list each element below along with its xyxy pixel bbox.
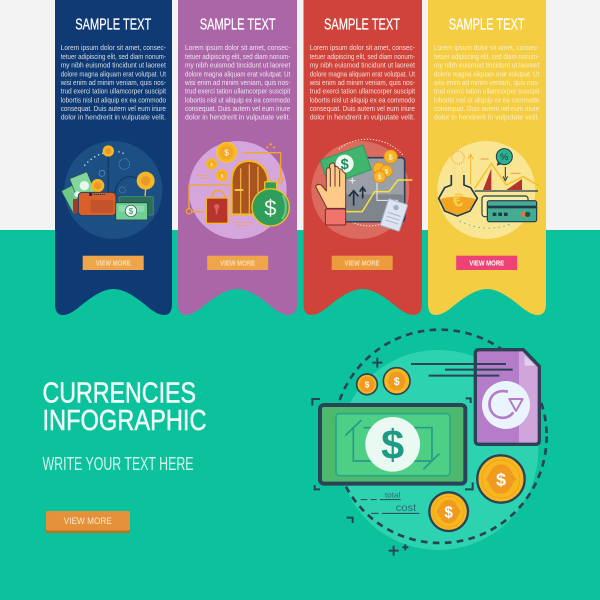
icon: small coin — [357, 374, 377, 395]
text block: purple panel: lobortis nisl ut aliquip ex ea commodo — [185, 95, 290, 104]
text block: yellow panel: lobortis nisl ut aliquip ex ea commodo — [434, 95, 539, 104]
icon: vault door, lock and money bag — [186, 141, 289, 239]
button: main view more — [46, 511, 130, 533]
text block: red panel — [309, 43, 416, 122]
panel: red ribbon — [304, 0, 422, 315]
text block: yellow panel: tetuer adipiscing elit, sed diam nonum- — [434, 52, 540, 61]
text block: navy panel: wisi enim ad minim veniam, quis nos- — [60, 78, 167, 87]
text block: yellow panel: consequat. Duis autem vel eum iriure — [434, 104, 539, 113]
icon: document with refresh arrow — [475, 350, 539, 444]
icon: wallet and money: $ — [129, 207, 134, 216]
label: total and cost: cost — [396, 503, 416, 514]
button: navy panel view more: VIEW MORE — [96, 260, 131, 267]
icon: flask, chart and credit cards: € — [453, 190, 464, 211]
text block: yellow panel: dolor in hendrerit in vulputate velit. — [434, 113, 539, 122]
title: INFOGRAPHIC — [42, 405, 206, 437]
icon: coin — [383, 368, 410, 394]
text block: red panel: my nibh euismod tincidunt ut laoreet — [310, 61, 415, 70]
text block: red panel: lobortis nisl ut aliquip ex ea commodo — [310, 95, 415, 104]
icon: hand, tablet chart and coins: $ — [341, 157, 349, 173]
label: total and cost: total — [385, 493, 401, 500]
text block: navy panel — [60, 43, 167, 122]
text block: purple panel — [184, 43, 291, 122]
button: navy panel view more — [83, 256, 144, 270]
icon: hand, tablet chart and coins — [311, 139, 412, 239]
icon: banknote — [320, 405, 465, 484]
text block: red panel: trud exerci tation ullamcorper suscipit — [310, 87, 415, 96]
teal lower background — [0, 230, 600, 600]
text block: yellow panel: dolore magna aliquam erat volutpat. Ut — [434, 69, 539, 78]
text block: navy panel: trud exerci tation ullamcorper suscipit — [61, 87, 166, 96]
button: yellow panel view more: VIEW MORE — [469, 260, 504, 267]
text block: red panel: wisi enim ad minim veniam, quis nos- — [309, 78, 416, 87]
icon: hand, tablet chart and coins: $ — [389, 152, 393, 161]
button: yellow panel view more — [456, 256, 517, 270]
panel: yellow ribbon — [428, 0, 546, 315]
label: total and cost — [361, 493, 419, 514]
icon: medium coin: $ — [444, 504, 453, 521]
text block: navy panel: my nibh euismod tincidunt ut laoreet — [61, 61, 166, 70]
icon: vault door, lock and money bag: $ — [210, 162, 213, 168]
text block: purple panel: dolore magna aliquam erat volutpat. Ut — [185, 69, 290, 78]
icon: plus marks and corner brackets — [312, 358, 473, 556]
illustration: currency exchange — [312, 330, 547, 556]
heading: navy panel: SAMPLE TEXT — [75, 16, 151, 34]
icon: background circle — [338, 350, 538, 550]
dashed orbit — [333, 330, 547, 543]
text block: navy panel: consequat. Duis autem vel eum iriure — [61, 104, 166, 113]
icon: small coin: $ — [365, 380, 370, 390]
icon: flask, chart and credit cards — [437, 141, 539, 239]
title — [42, 378, 206, 437]
text block: purple panel: consequat. Duis autem vel eum iriure — [185, 104, 290, 113]
text block: red panel: consequat. Duis autem vel eum iriure — [310, 104, 415, 113]
icon: large coin: $ — [496, 470, 506, 490]
button: main view more: VIEW MORE — [64, 516, 112, 527]
icon: coin: $ — [394, 376, 400, 388]
icon: vault door, lock and money bag: $ — [224, 148, 229, 157]
text block: purple panel: tetuer adipiscing elit, sed diam nonum- — [185, 52, 291, 61]
icon: hand, tablet chart and coins: $ — [378, 174, 382, 181]
text block: red panel: dolor in hendrerit in vulputate velit. — [310, 113, 415, 122]
text block: purple panel: trud exerci tation ullamcorper suscipit — [185, 87, 290, 96]
text block: yellow panel: wisi enim ad minim veniam, quis nos- — [433, 78, 540, 87]
text block: purple panel: Lorem ipsum dolor sit amet, consec- — [185, 43, 291, 52]
text block: navy panel: lobortis nisl ut aliquip ex ea commodo — [61, 95, 166, 104]
text block: navy panel: tetuer adipiscing elit, sed diam nonum- — [61, 52, 167, 61]
text block: navy panel: Lorem ipsum dolor sit amet, consec- — [61, 43, 167, 52]
text block: yellow panel: my nibh euismod tincidunt ut laoreet — [434, 61, 539, 70]
heading: purple panel: SAMPLE TEXT — [200, 16, 276, 34]
text block: navy panel: dolor in hendrerit in vulputate velit. — [61, 113, 166, 122]
heading: red panel: SAMPLE TEXT — [324, 16, 400, 34]
text block: red panel: tetuer adipiscing elit, sed diam nonum- — [310, 52, 416, 61]
icon: large coin — [477, 455, 525, 503]
title: CURRENCIES — [42, 378, 196, 410]
button: purple panel view more: VIEW MORE — [220, 260, 255, 267]
subtitle: WRITE YOUR TEXT HERE — [42, 454, 194, 474]
text block: red panel: Lorem ipsum dolor sit amet, consec- — [310, 43, 416, 52]
button: red panel view more: VIEW MORE — [344, 260, 380, 267]
speed lines — [411, 364, 513, 376]
icon: banknote: $ — [381, 422, 404, 468]
text block: navy panel: dolore magna aliquam erat volutpat. Ut — [61, 69, 166, 78]
icon: vault door, lock and money bag: $ — [264, 195, 276, 220]
text block: yellow panel: Lorem ipsum dolor sit amet, consec- — [434, 43, 540, 52]
text block: purple panel: dolor in hendrerit in vulputate velit. — [185, 113, 290, 122]
text block: purple panel: my nibh euismod tincidunt ut laoreet — [185, 61, 290, 70]
panel: navy ribbon — [55, 0, 172, 315]
heading: yellow panel: SAMPLE TEXT — [449, 16, 525, 34]
text block: red panel: dolore magna aliquam erat volutpat. Ut — [310, 69, 415, 78]
button: red panel view more — [332, 256, 393, 270]
icon: wallet and money — [61, 141, 162, 239]
panel: purple ribbon — [178, 0, 297, 315]
text block: yellow panel: trud exerci tation ullamcorper suscipit — [434, 87, 539, 96]
text block: purple panel: wisi enim ad minim veniam, quis nos- — [184, 78, 291, 87]
button: purple panel view more — [207, 256, 268, 270]
icon: medium coin — [429, 492, 468, 531]
icon: hand, tablet chart and coins: $ — [384, 168, 388, 175]
text block: yellow panel — [433, 43, 540, 122]
icon: flask, chart and credit cards: % — [500, 152, 508, 162]
icon: vault door, lock and money bag: $ — [221, 173, 224, 179]
